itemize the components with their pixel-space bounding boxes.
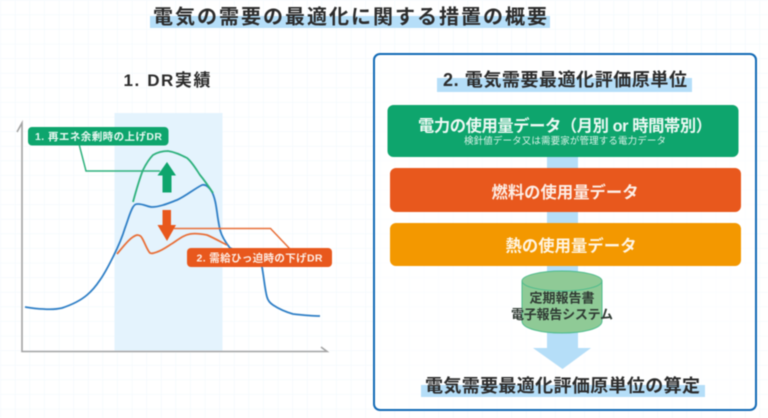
panel: intensity (374, 54, 756, 410)
callout: tight supply DR: 2. 需給ひっ迫時の下げDR (196, 252, 323, 264)
heading highlight: 2. 電気需要最適化評価原単位 (443, 69, 687, 90)
highlighted time band (114, 113, 222, 351)
panel border (374, 54, 756, 410)
heading: DR results: 1. DR実績 (124, 71, 210, 90)
box: fuel data (390, 168, 741, 212)
box: heat data (390, 223, 741, 266)
box: heat data: 熱の使用量データ (506, 236, 636, 256)
blue demand curve (25, 185, 320, 316)
callout: tight supply DR (187, 248, 332, 267)
icon: flow arrow (533, 157, 591, 369)
icon: database cylinder: 定期報告書 (530, 290, 594, 306)
panel: DR results (17, 71, 332, 352)
callout: renewable surplus DR: 1. 再エネ余剰時の上げDR (35, 130, 162, 143)
box: electricity data (388, 105, 738, 157)
icon: green up arrow (158, 162, 176, 192)
green leader line (79, 144, 160, 171)
orange leader line (174, 228, 290, 249)
green raised curve (133, 151, 213, 202)
orange lowered curve (117, 234, 227, 254)
title: 電気の需要の最適化に関する措置の概要 (153, 6, 547, 28)
icon: orange down arrow (158, 210, 176, 241)
box: fuel data: 燃料の使用量データ (492, 183, 638, 202)
box: electricity data: 電力の使用量データ（月別 or 時間帯別） (418, 116, 712, 136)
result label: 電気需要最適化評価原単位の算定 (425, 375, 700, 396)
box: electricity data: 検針値データ又は需要家が管理する電力データ (464, 135, 666, 147)
icon: database cylinder (511, 271, 613, 333)
icon: database cylinder: 電子報告システム (511, 307, 613, 322)
chart axes (17, 123, 327, 352)
callout: renewable surplus DR (28, 127, 168, 146)
